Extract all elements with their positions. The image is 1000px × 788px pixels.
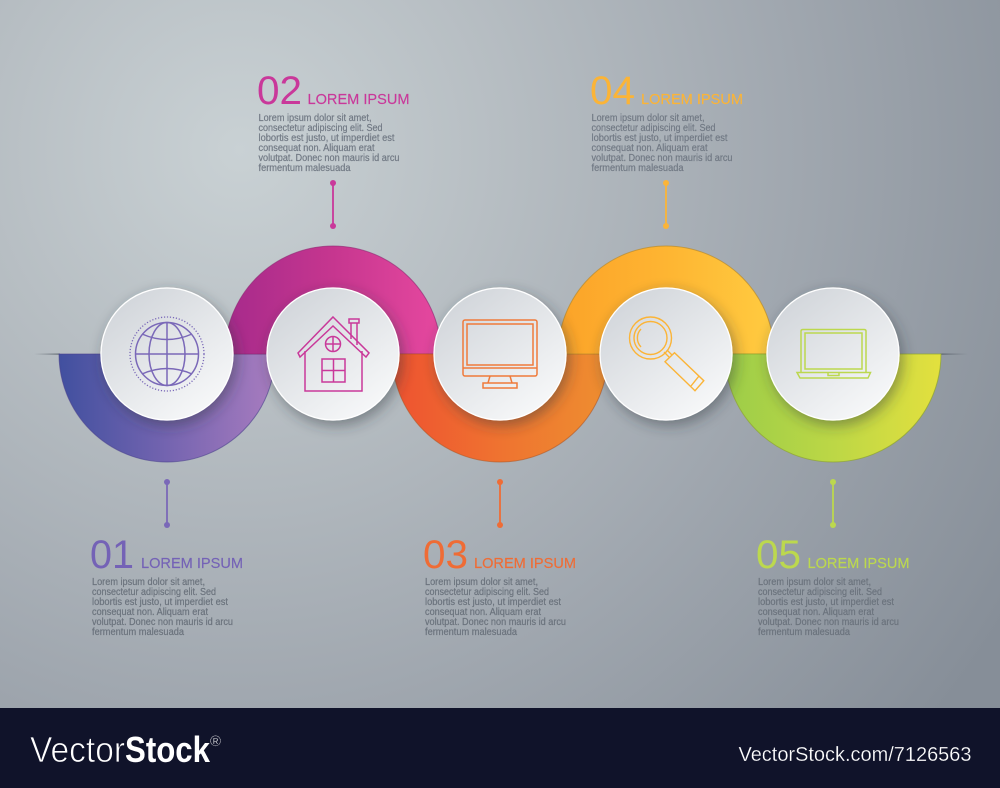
text 02: consequat non. Aliquam erat <box>258 143 375 154</box>
text 02: consectetur adipiscing elit. Sed <box>258 123 382 134</box>
text 02: fermentum malesuada <box>258 163 351 174</box>
text 01: fermentum malesuada <box>92 627 185 638</box>
text 02: volutpat. Donec non mauris id arcu <box>258 153 400 164</box>
text 04: volutpat. Donec non mauris id arcu <box>592 153 732 164</box>
text 01: lobortis est justo, ut imperdiet est <box>92 597 228 608</box>
text 05: volutpat. Donec non mauris id arcu <box>758 617 899 628</box>
connector 05 <box>830 479 836 528</box>
heading 01: LOREM IPSUM <box>141 555 243 572</box>
text 01: volutpat. Donec non mauris id arcu <box>92 617 233 628</box>
text 03: consectetur adipiscing elit. Sed <box>425 587 549 598</box>
arc 05 <box>725 354 941 462</box>
circle 02 with house icon <box>267 288 399 420</box>
circle 04 with magnifier icon <box>600 288 732 420</box>
text 05: lobortis est justo, ut imperdiet est <box>758 597 894 608</box>
logo <box>30 729 221 770</box>
horizon line <box>34 354 968 355</box>
text 05: consectetur adipiscing elit. Sed <box>758 587 882 598</box>
heading 05: LOREM IPSUM <box>808 555 910 572</box>
text 04: fermentum malesuada <box>592 163 684 174</box>
icon: monitor <box>463 320 537 388</box>
text 01: Lorem ipsum dolor sit amet, <box>92 577 205 588</box>
step 01 block <box>90 479 243 638</box>
text 05: Lorem ipsum dolor sit amet, <box>758 577 871 588</box>
logo: ® <box>210 733 221 750</box>
arc 04 <box>558 246 774 354</box>
connector 03 <box>497 479 503 528</box>
text 04: Lorem ipsum dolor sit amet, <box>592 113 704 124</box>
text 04: lobortis est justo, ut imperdiet est <box>592 133 728 144</box>
text 03 <box>425 577 566 638</box>
text 03: fermentum malesuada <box>425 627 518 638</box>
text 04: consequat non. Aliquam erat <box>592 143 708 154</box>
semicircle arcs <box>59 246 941 462</box>
text 05: consequat non. Aliquam erat <box>758 607 874 618</box>
text 04: consectetur adipiscing elit. Sed <box>592 123 716 134</box>
number 02: 02 <box>257 69 302 113</box>
step 04 block <box>590 69 743 229</box>
circle 03 with monitor icon <box>434 288 566 420</box>
footer bar <box>0 708 1000 788</box>
text 03: lobortis est justo, ut imperdiet est <box>425 597 561 608</box>
text 03: Lorem ipsum dolor sit amet, <box>425 577 538 588</box>
number 04: 04 <box>590 69 635 113</box>
logo: Stock <box>125 729 211 770</box>
logo: Vector <box>30 729 125 770</box>
heading 04: LOREM IPSUM <box>641 91 743 108</box>
icon: laptop <box>797 330 870 378</box>
icon: globe <box>130 317 204 391</box>
arc 01 <box>59 354 275 462</box>
arc 03 <box>392 354 608 462</box>
text 01: consectetur adipiscing elit. Sed <box>92 587 216 598</box>
connector 02 <box>330 180 336 229</box>
text 02: lobortis est justo, ut imperdiet est <box>258 133 395 144</box>
text 03: consequat non. Aliquam erat <box>425 607 541 618</box>
text 04 <box>592 113 732 174</box>
text 05 <box>758 577 899 638</box>
text 02 <box>258 113 400 174</box>
text 03: volutpat. Donec non mauris id arcu <box>425 617 566 628</box>
number 01: 01 <box>90 533 134 577</box>
connector 04 <box>663 180 669 229</box>
step 03 block <box>423 479 576 638</box>
circle 05 with laptop icon <box>767 288 899 420</box>
number 03: 03 <box>423 533 468 577</box>
arc 02 <box>225 246 441 354</box>
circle 01 with globe icon <box>101 288 233 420</box>
text 05: fermentum malesuada <box>758 627 851 638</box>
text 01 <box>92 577 233 638</box>
icon: magnifying glass <box>630 317 704 391</box>
number 05: 05 <box>756 533 801 577</box>
icon: house <box>298 317 369 391</box>
heading 03: LOREM IPSUM <box>474 555 576 572</box>
text 01: consequat non. Aliquam erat <box>92 607 208 618</box>
text 02: Lorem ipsum dolor sit amet, <box>258 113 372 124</box>
connector 01 <box>164 479 170 528</box>
heading 02: LOREM IPSUM <box>308 91 410 108</box>
step 05 block <box>756 479 910 638</box>
image id: VectorStock.com/7126563 <box>738 743 972 766</box>
step 02 block <box>257 69 410 229</box>
